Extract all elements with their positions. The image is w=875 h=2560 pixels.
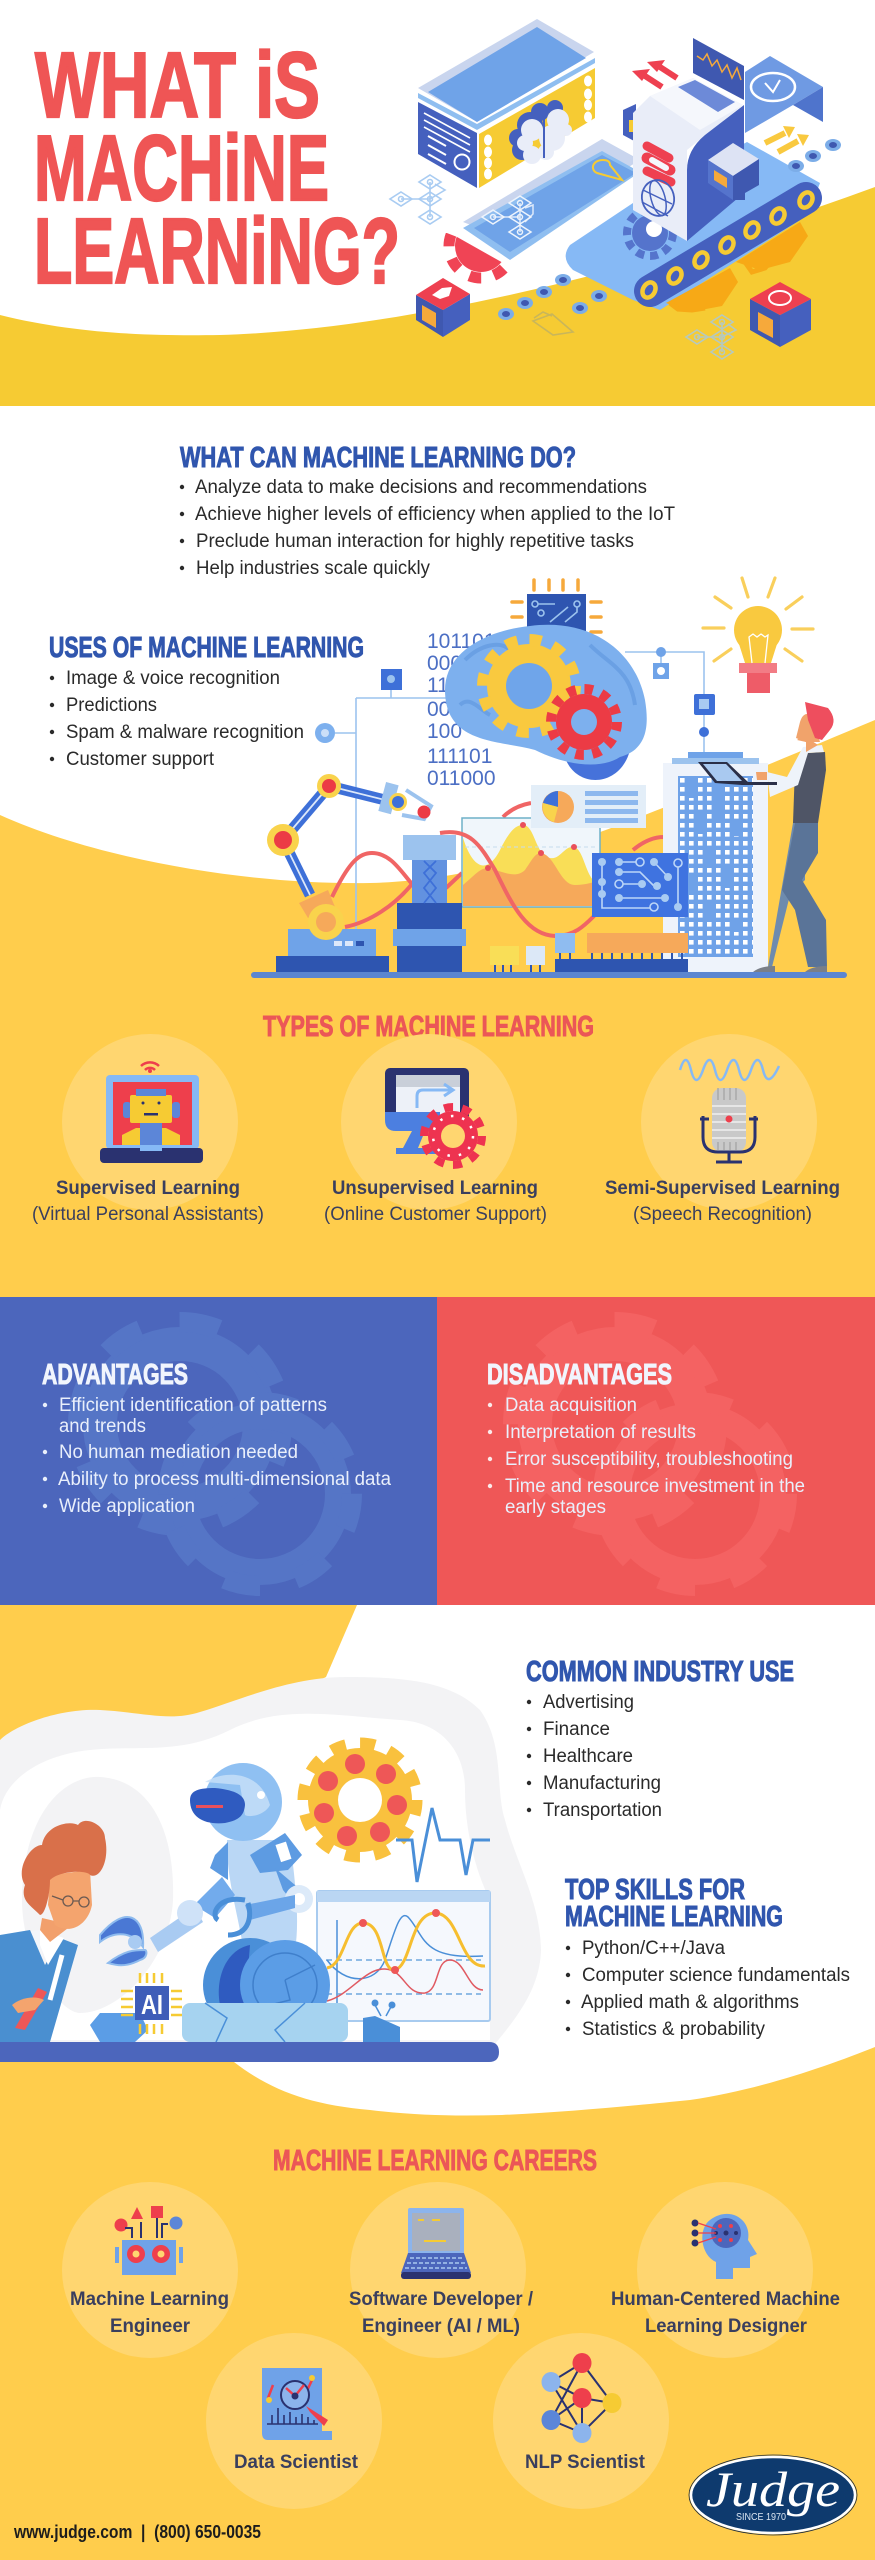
section: uses of machine learning: USES OF MACHINE LEARNING [49,632,364,664]
career: NLP scientist [493,2333,669,2509]
illustration: engineer with AI brain and robotics [251,578,847,978]
section: top skills for machine learning: Applied math & algorithms [581,1992,799,2013]
section: common industry use: Transportation [543,1800,662,1821]
career: NLP scientist: NLP Scientist [525,2452,646,2473]
title: WHAT iS [35,33,320,137]
logo: Judge since 1970: Judge [706,2461,840,2517]
data dots [498,139,841,320]
panel: advantages: Efficient identification of patterns [59,1395,327,1416]
panel: advantages [0,1297,437,1605]
logo: Judge since 1970: SINCE 1970 [736,2511,786,2523]
type: unsupervised learning: Unsupervised Learning [332,1178,538,1199]
chart window [317,1891,490,2021]
icon: robot with inputs [114,2206,183,2275]
career: machine learning engineer: Engineer [110,2316,191,2337]
header illustration: isometric machine learning factory [390,19,841,359]
red sine wave over chart [440,832,595,936]
robot arm [267,774,431,972]
title: MACHiNE [34,116,329,220]
binary digits: 00 [427,698,450,721]
connector nodes [315,647,715,743]
career: human-centered machine learning designer [611,2182,840,2358]
machine tower [623,78,759,256]
section: top skills for machine learning [565,1874,850,2040]
type: semi-supervised learning: Semi-Supervised Learning [605,1178,840,1199]
light bulb [703,578,813,693]
lower section backgrounds [0,1605,357,1760]
section: what can machine learning do: Analyze data to make decisions and recommendations [195,477,647,498]
section: top skills for machine learning: Statistics & probability [582,2019,765,2040]
server tower [663,752,768,972]
panel: advantages: ADVANTAGES [42,1359,188,1391]
conveyor belt [566,142,820,312]
network glyphs and lock [390,175,736,359]
AI chip [121,1973,182,2034]
section: uses of machine learning: Image & voice recognition [66,668,280,689]
footer contact line: www.judge.com | (800) 650-0035 [13,2521,261,2542]
type: semi-supervised learning: (Speech Recognition) [633,1204,812,1225]
section: what can machine learning do: Achieve higher levels of efficiency when applied to the IoT [195,504,675,525]
icon: head with network [692,2214,757,2279]
heading: machine learning careers: MACHINE LEARNING CAREERS [273,2145,597,2177]
broken block [182,2003,348,2042]
input plate with network [463,139,640,260]
stage bar [0,2042,499,2062]
data box with brain [418,19,595,188]
career: human-centered machine learning designer: Human-Centered Machine [611,2289,840,2310]
icon: robot on laptop [100,1062,203,1163]
binary digits: 111101 [427,745,492,768]
pie panel [531,785,646,828]
icon: laptop [401,2208,471,2279]
section: top skills for machine learning: TOP SKILLS FOR [565,1874,745,1906]
floor bar [251,972,847,978]
small components [490,933,688,972]
type: unsupervised learning: (Online Customer Support) [324,1204,547,1225]
career: machine learning engineer [62,2182,238,2358]
cube right [750,282,811,347]
career: data scientist: Data Scientist [234,2452,359,2473]
icon: neural network [542,2353,622,2443]
gears under belt [666,222,808,312]
illustration: scientist and robot [0,1744,499,2062]
icon: report with magnifier [262,2368,332,2440]
section: common industry use [526,1656,794,1821]
section: common industry use: Healthcare [543,1746,633,1767]
middle yellow wave [0,720,875,1297]
arrows [632,60,809,152]
panel: disadvantages: Data acquisition [505,1395,637,1416]
type: supervised learning: (Virtual Personal Assistants) [32,1204,264,1225]
career: software developer: Software Developer / [349,2289,534,2310]
robot [100,1763,330,2032]
area chart [462,818,600,907]
section: top skills for machine learning: MACHINE LEARNING [565,1901,783,1933]
binary digits: 000 [427,652,462,675]
section: top skills for machine learning: Computer science fundamentals [582,1965,850,1986]
watermark gears [513,1322,787,1586]
connector lines [335,652,704,930]
red wires behind equipment [332,803,664,927]
engineer with laptop [698,702,834,972]
panel: advantages: Wide application [59,1496,195,1517]
panel: disadvantages: Interpretation of results [505,1422,696,1443]
panel: disadvantages: DISADVANTAGES [487,1359,672,1391]
header yellow wave [0,187,875,406]
red half gear [444,233,508,284]
binary digits: 011000 [427,767,496,790]
antenna block [363,2000,400,2042]
section: what can machine learning do: Help industries scale quickly [196,558,430,579]
binary digits: 101101 [427,630,496,653]
output panels [693,38,823,133]
title: LEARNiNG? [34,199,400,303]
heading: types of machine learning: TYPES OF MACHINE LEARNING [263,1011,594,1043]
career: machine learning engineer: Machine Learning [70,2289,229,2310]
yellow gear with red dots [304,1744,416,1856]
panel: disadvantages [437,1297,875,1605]
press column [393,835,466,972]
title [34,33,400,303]
section: common industry use: Advertising [543,1692,634,1713]
binary digits [427,630,496,790]
binary digits: 11 [427,674,449,697]
career: data scientist [206,2333,382,2509]
cube left [416,278,470,337]
panel: advantages: and trends [59,1416,146,1437]
small block [90,2013,148,2042]
panel: disadvantages: early stages [505,1497,606,1518]
watermark gears [78,1322,352,1586]
scientist [0,1821,106,2042]
icon: monitor and gear [385,1068,482,1165]
section: what can machine learning do: WHAT CAN MACHINE LEARNING DO? [180,442,576,474]
logo: Judge since 1970 [689,2455,857,2535]
section: what can machine learning do: Preclude human interaction for highly repetitive tasks [196,531,634,552]
binary digits: 100 [427,720,462,743]
section: uses of machine learning [49,632,364,770]
pulse line [396,1808,490,1882]
icon: microphone [680,1060,779,1162]
career: human-centered machine learning designer: Learning Designer [645,2316,808,2337]
section: common industry use: Manufacturing [543,1773,661,1794]
type: unsupervised learning [324,1034,547,1225]
type: supervised learning: Supervised Learning [56,1178,240,1199]
AI chip: AI [141,1989,163,2020]
type: semi-supervised learning [605,1034,840,1225]
panel: advantages: Ability to process multi-dimensional data [58,1469,391,1490]
type: supervised learning [32,1034,264,1225]
panel: advantages: No human mediation needed [59,1442,298,1463]
section: uses of machine learning: Spam & malware recognition [66,722,304,743]
career: software developer [349,2182,534,2358]
section: what can machine learning do [180,442,675,579]
circuit board [592,853,688,917]
career: software developer: Engineer (AI / ML) [362,2316,520,2337]
section: uses of machine learning: Predictions [66,695,157,716]
section: common industry use: COMMON INDUSTRY USE [526,1656,794,1688]
section: uses of machine learning: Customer support [66,749,215,770]
section: top skills for machine learning: Python/C++/Java [582,1938,725,1959]
panel: disadvantages: Time and resource investment in the [505,1476,805,1497]
chip [512,580,601,634]
panel: disadvantages: Error susceptibility, troubleshooting [505,1449,793,1470]
section: common industry use: Finance [543,1719,610,1740]
brain with gears [445,625,647,780]
